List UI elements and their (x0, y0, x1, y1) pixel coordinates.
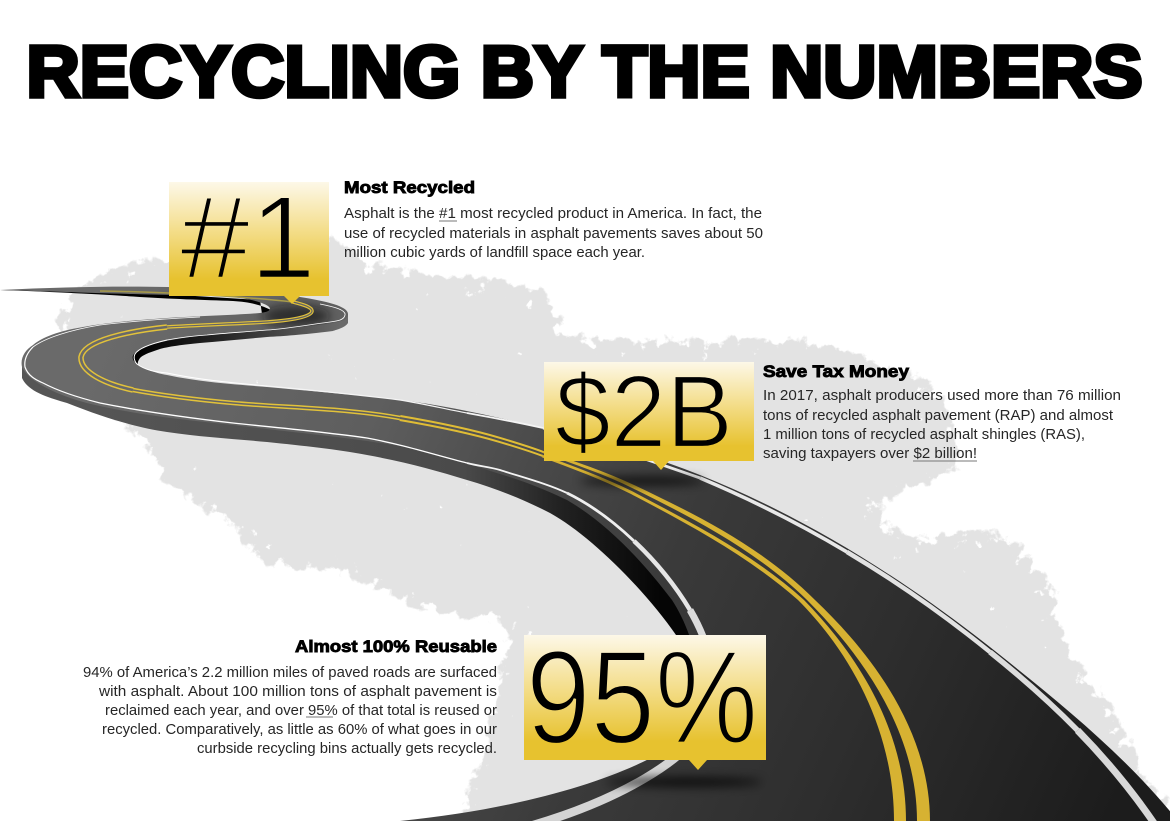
road side wall: lower left (22, 365, 710, 760)
callout box with pointer (524, 635, 766, 770)
body text (763, 388, 1121, 462)
road side wall: inner bend (125, 314, 348, 368)
big number 95%: 95% (526, 624, 758, 772)
winding asphalt road (0, 287, 1170, 821)
body text: tons of recycled asphalt pavement (RAP) and almost (763, 408, 1113, 424)
body text (344, 206, 763, 261)
body text: curbside recycling bins actually gets recycled. (197, 741, 497, 757)
left edge line (25, 317, 713, 821)
body text: million cubic yards of landfill space each year. (344, 245, 645, 261)
body text: with asphalt. About 100 million tons of asphalt pavement is (98, 684, 497, 700)
heading: Save Tax Money (763, 362, 910, 381)
road side wall: far section (0, 290, 273, 314)
body text: 94% of America’s 2.2 million miles of paved roads are surfaced (83, 665, 497, 681)
double yellow centre line: near left strip (542, 455, 906, 821)
body text: saving taxpayers over $2 billion! (763, 446, 977, 462)
body text: 1 million tons of recycled asphalt shingles (RAS), (763, 427, 1085, 443)
double yellow centre line: far (81, 291, 543, 454)
panel: save tax money (544, 354, 1121, 486)
grey splatter background (60, 238, 1170, 821)
right edge line (134, 304, 1156, 821)
body text: In 2017, asphalt producers used more than 76 million (763, 388, 1121, 404)
panel: most recycled (169, 172, 763, 304)
big number $2B: $2B (555, 354, 733, 469)
big number #1: 1 (250, 172, 316, 304)
body text: use of recycled materials in asphalt pavements saves about 50 (344, 226, 763, 242)
road surface (0, 287, 1170, 821)
big number #1 (180, 172, 316, 304)
double yellow centre line: near right strip (543, 451, 930, 821)
body text (83, 665, 497, 757)
bend shading (262, 305, 330, 327)
body text: Asphalt is the #1 most recycled product in America. In fact, the (344, 206, 762, 222)
panel: almost 100% reusable (83, 624, 766, 786)
callout box with pointer (169, 182, 329, 304)
body text: recycled. Comparatively, as little as 60% of what goes in our (102, 722, 497, 738)
heading: Almost 100% Reusable (295, 637, 497, 656)
body text: reclaimed each year, and over 95% of that total is reused or (105, 703, 497, 719)
callout shadow (580, 476, 704, 486)
callout box with pointer (544, 362, 754, 470)
heading: Most Recycled (344, 178, 475, 197)
callout shadow (606, 778, 762, 786)
big number #1: # (180, 172, 250, 304)
title: RECYCLING BY THE NUMBERS (26, 32, 1142, 112)
